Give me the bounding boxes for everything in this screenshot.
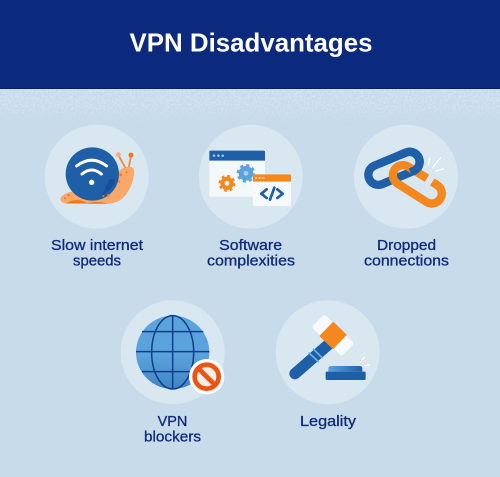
icon: broken chain link	[368, 152, 443, 204]
icon circle: globe	[121, 300, 225, 404]
panel: legality	[276, 300, 380, 430]
label: blockers	[144, 428, 201, 446]
icon circle: snail	[45, 125, 149, 229]
icon circle: software	[199, 125, 303, 229]
label: speeds	[73, 252, 121, 270]
panel: dropped connections	[354, 125, 458, 270]
icon: app windows	[209, 151, 291, 206]
panel: software complexities	[199, 125, 303, 270]
label: Software	[219, 237, 282, 254]
label: Slow internet	[51, 237, 144, 254]
label: complexities	[207, 252, 295, 270]
label: Legality	[300, 413, 357, 430]
icon: snail	[60, 147, 134, 204]
title: VPN Disadvantages	[130, 28, 372, 58]
label	[144, 413, 201, 446]
label	[207, 237, 295, 270]
header banner	[0, 0, 500, 89]
icon circle: links	[354, 125, 458, 229]
icon circle: gavel	[276, 300, 380, 404]
label: connections	[364, 252, 449, 270]
icon: globe with prohibition badge	[136, 316, 224, 394]
label: Dropped	[377, 237, 436, 254]
icon: gavel	[295, 314, 369, 380]
label	[364, 237, 449, 270]
panel: VPN blockers	[121, 300, 225, 446]
speckled texture band	[0, 89, 500, 108]
label	[51, 237, 144, 270]
label: VPN	[158, 413, 187, 430]
panel: slow internet speeds	[45, 125, 149, 270]
